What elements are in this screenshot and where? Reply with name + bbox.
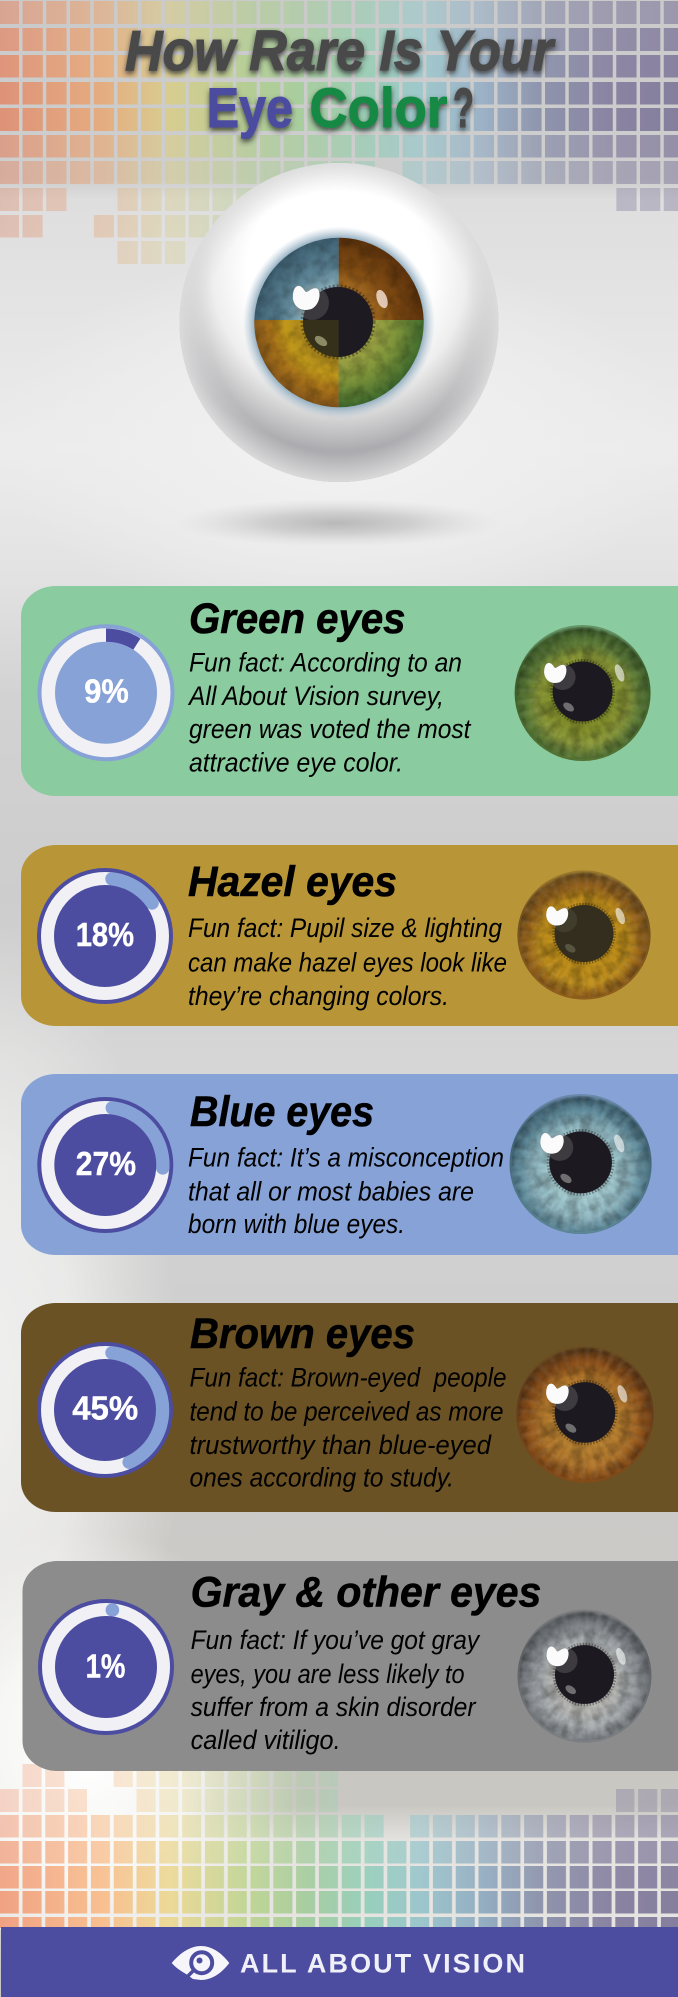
iris halo xyxy=(243,226,435,418)
panel: green eyes xyxy=(21,586,678,796)
fun fact text: called vitiligo. xyxy=(191,1725,341,1755)
donut chart: 18% xyxy=(39,870,171,1002)
heading: Hazel eyes xyxy=(188,858,397,906)
heading: Green eyes xyxy=(189,595,406,643)
heading: Blue eyes xyxy=(190,1088,374,1136)
panel background xyxy=(21,586,678,796)
fun fact text: green was voted the most xyxy=(189,714,472,744)
fun fact text xyxy=(188,913,507,1011)
fun fact text xyxy=(190,1363,506,1493)
fun fact text: can make hazel eyes look like xyxy=(188,948,507,978)
donut chart: 9% xyxy=(40,626,172,759)
fun fact text xyxy=(191,1625,481,1755)
icon: hazel eye xyxy=(517,870,651,1000)
fun fact text: eyes, you are less likely to xyxy=(191,1659,465,1689)
panel background xyxy=(21,1303,678,1512)
fun fact text: Fun fact: Brown-eyed people xyxy=(190,1363,506,1393)
eye highlights xyxy=(293,286,390,348)
donut chart: 1%: 1% xyxy=(86,1647,125,1684)
eyeball sphere xyxy=(180,163,498,482)
fun fact text: Fun fact: If you’ve got gray xyxy=(191,1625,481,1655)
fun fact text: Fun fact: According to an xyxy=(189,648,462,678)
fun fact text: that all or most babies are xyxy=(188,1177,474,1207)
donut chart: 45% xyxy=(39,1344,171,1476)
fun fact text xyxy=(188,1143,504,1239)
donut chart: 1% xyxy=(40,1601,172,1733)
title question mark: ? xyxy=(453,76,474,139)
fun fact text: they’re changing colors. xyxy=(188,981,449,1011)
icon: blue eye xyxy=(510,1094,652,1234)
bottom color mosaic xyxy=(0,1764,678,1928)
top color mosaic xyxy=(0,1,678,264)
pupil xyxy=(295,286,374,358)
panel background xyxy=(21,845,678,1026)
title line 1: How Rare Is Your xyxy=(125,19,556,83)
title word: Eye: Eye xyxy=(207,76,293,139)
donut chart: 18%: 18% xyxy=(76,916,134,953)
fun fact text: born with blue eyes. xyxy=(188,1209,405,1239)
fun fact text: suffer from a skin disorder xyxy=(191,1692,477,1722)
donut chart: 9%: 9% xyxy=(84,673,129,710)
panel: brown eyes xyxy=(21,1303,678,1512)
icon: All About Vision logo eye xyxy=(172,1946,229,1980)
fun fact text: Fun fact: It’s a misconception xyxy=(188,1143,504,1173)
title word: Color: Color xyxy=(310,76,448,139)
brand name: ALL ABOUT VISION xyxy=(240,1949,525,1979)
panel: hazel eyes xyxy=(21,845,678,1026)
icon: brown eye xyxy=(516,1345,654,1483)
fun fact text: trustworthy than blue-eyed xyxy=(190,1430,492,1460)
panel: blue eyes xyxy=(21,1074,678,1255)
donut chart: 45%: 45% xyxy=(72,1389,138,1426)
heading: Gray & other eyes xyxy=(191,1569,541,1617)
panel: gray and other eyes xyxy=(22,1561,678,1771)
panel background xyxy=(22,1561,678,1771)
title xyxy=(125,19,556,139)
fun fact text: tend to be perceived as more xyxy=(190,1397,504,1427)
fun fact text: ones according to study. xyxy=(190,1463,454,1493)
fun fact text: All About Vision survey, xyxy=(187,681,444,711)
donut chart: 27%: 27% xyxy=(76,1145,136,1182)
heading: Brown eyes xyxy=(190,1310,415,1358)
floating shadow xyxy=(173,499,503,547)
iris quadrants: blue, brown, hazel, green xyxy=(254,237,424,408)
donut chart: 27% xyxy=(39,1099,171,1231)
fun fact text xyxy=(187,648,472,778)
fun fact text: attractive eye color. xyxy=(189,748,403,778)
illustration: large eyeball xyxy=(173,163,503,547)
icon: gray eye xyxy=(518,1609,651,1743)
footer band xyxy=(1,1927,678,1997)
icon: green eye xyxy=(515,625,651,761)
panel background xyxy=(21,1074,678,1255)
fun fact text: Fun fact: Pupil size & lighting xyxy=(188,913,502,943)
